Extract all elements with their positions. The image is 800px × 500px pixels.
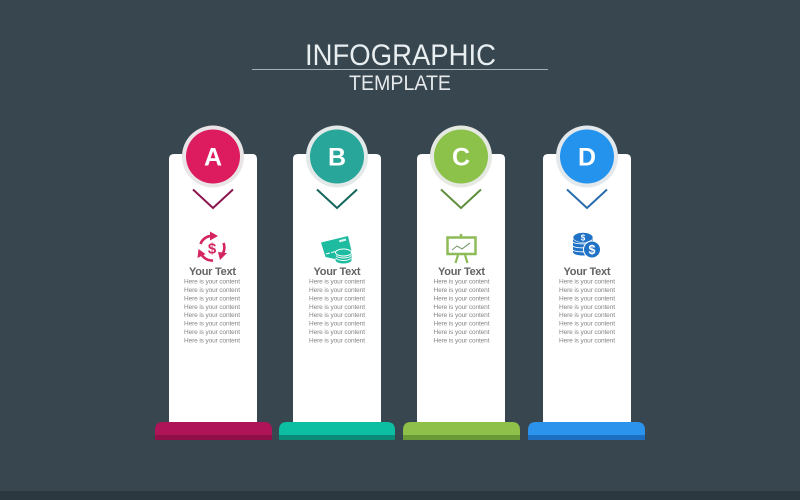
icon: dollar cycle: $ [208, 240, 217, 258]
text: B: Here is your content [309, 304, 365, 311]
text: B: Here is your content [309, 312, 365, 319]
text: A: Here is your content [184, 304, 240, 311]
title [252, 39, 548, 95]
text: C: Here is your content [434, 304, 490, 311]
text: D: Here is your content [559, 321, 615, 328]
badge: D: D [578, 144, 596, 172]
card: C [417, 154, 505, 422]
text: A: Here is your content [184, 321, 240, 328]
badge: A [182, 126, 244, 188]
text: D: Here is your content [559, 304, 615, 311]
base: C [403, 422, 520, 440]
panel: A [155, 126, 272, 440]
text: B: Here is your content [309, 287, 365, 294]
card: B [293, 154, 381, 422]
text: C: Here is your content [434, 295, 490, 302]
text: C: Here is your content [434, 278, 490, 286]
icon: coin stack [573, 232, 600, 258]
text: B: Here is your content [309, 338, 365, 344]
badge: D [556, 126, 618, 188]
text: B [309, 266, 365, 344]
text: D: Here is your content [559, 338, 615, 344]
title: INFOGRAPHIC [305, 39, 496, 72]
text: A: Here is your content [184, 329, 240, 336]
title: TEMPLATE [349, 72, 451, 95]
panel: B [279, 126, 395, 440]
badge: C [430, 126, 492, 188]
badge: A: A [204, 144, 222, 172]
panel: C [403, 126, 520, 440]
text: C: Your Text [438, 266, 485, 278]
card: A [169, 154, 257, 422]
badge: B: B [328, 144, 346, 172]
arrow: C [441, 190, 481, 208]
text: D: Here is your content [559, 329, 615, 336]
text: B: Here is your content [309, 295, 365, 302]
icon: presentation board [448, 234, 476, 263]
text: C: Here is your content [434, 287, 490, 294]
arrow: A [193, 190, 233, 208]
card: D [543, 154, 631, 422]
text: B: Here is your content [309, 321, 365, 328]
text: D [559, 266, 615, 344]
arrow: B [317, 190, 357, 208]
badge: B [306, 126, 368, 188]
text: A: Here is your content [184, 338, 240, 344]
text: B: Your Text [314, 266, 361, 278]
text: D: Here is your content [559, 287, 615, 294]
icon: coin stack: $ [589, 243, 596, 257]
text: C: Here is your content [434, 338, 490, 344]
icon: dollar cycle [198, 232, 227, 261]
text: D: Here is your content [559, 295, 615, 302]
text: A [184, 266, 240, 344]
text: C [434, 266, 490, 344]
text: B: Here is your content [309, 329, 365, 336]
base: B [279, 422, 395, 440]
text: A: Here is your content [184, 278, 240, 286]
text: D: Here is your content [559, 278, 615, 286]
text: D: Here is your content [559, 312, 615, 319]
text: A: Your Text [189, 266, 236, 278]
icon: coin stack: $ [581, 234, 586, 242]
text: A: Here is your content [184, 287, 240, 294]
base: A [155, 422, 272, 440]
panel: D [528, 126, 645, 440]
icon: card and coins [321, 236, 352, 264]
text: A: Here is your content [184, 295, 240, 302]
text: D: Your Text [564, 266, 611, 278]
text: A: Here is your content [184, 312, 240, 319]
badge: C: C [452, 144, 470, 172]
text: C: Here is your content [434, 329, 490, 336]
text: C: Here is your content [434, 321, 490, 328]
text: B: Here is your content [309, 278, 365, 286]
base: D [528, 422, 645, 440]
text: C: Here is your content [434, 312, 490, 319]
arrow: D [567, 190, 607, 208]
